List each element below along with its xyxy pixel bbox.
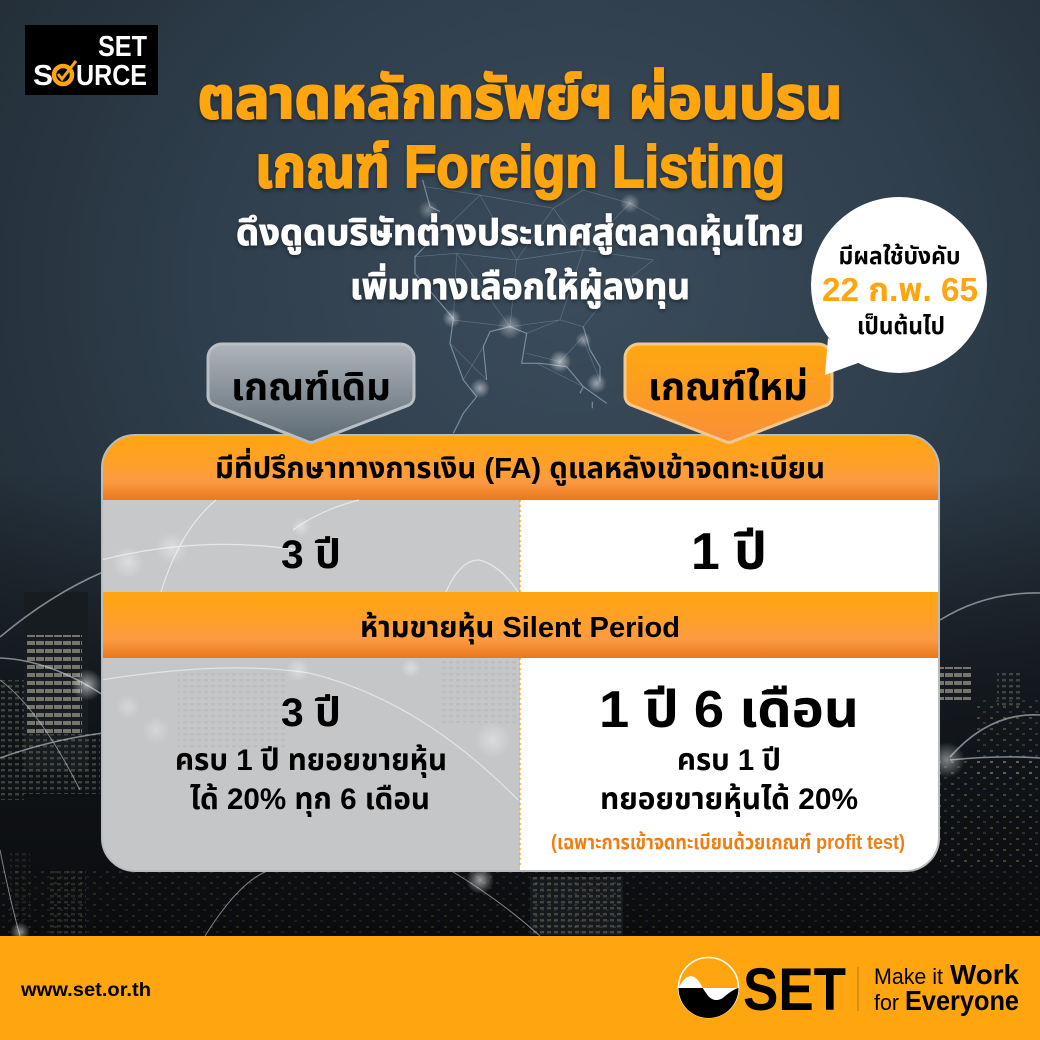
logo: SET SOURCE: URCE	[76, 60, 147, 92]
old rule cell: silent period	[101, 658, 520, 870]
tag: new rule: เกณฑ์ใหม่	[648, 367, 808, 409]
header: silent period: ห้ามขายหุ้น Silent Period	[360, 612, 680, 644]
new rule cell: silent period: ทยอยขายหุ้นได้ 20%	[600, 783, 858, 817]
callout: effective date: เป็นต้นไป	[857, 312, 945, 340]
old rule cell: 3 years	[101, 500, 520, 592]
panel: comparison card	[101, 436, 938, 870]
tag: old rule: เกณฑ์เดิม	[231, 367, 391, 409]
tag: old rule	[208, 344, 414, 442]
header: silent period	[103, 592, 938, 658]
slogan: Everyone	[905, 985, 1019, 1016]
old rule cell: 3 years: 3 ปี	[281, 533, 341, 577]
subtitle: เพิ่มทางเลือกให้ผู้ลงทุน	[350, 263, 690, 308]
new rule cell: silent period: (เฉพาะการเข้าจดทะเบียนด้วยเกณฑ์ profit test)	[551, 832, 905, 854]
logo: SET SOURCE: SET	[98, 31, 147, 63]
map network	[415, 180, 660, 433]
callout: effective date: มีผลใช้บังคับ	[838, 242, 960, 270]
header: financial advisor	[103, 436, 938, 500]
slogan: for	[874, 990, 899, 1015]
new rule cell: 1 year: 1 ปี	[691, 523, 767, 581]
slogan	[874, 959, 1019, 1016]
footer band	[0, 936, 1040, 1040]
old rule cell: silent period: ได้ 20% ทุก 6 เดือน	[190, 783, 430, 817]
logo: SET: SET	[743, 956, 846, 1023]
website url: www.set.or.th	[20, 980, 151, 1001]
subtitle: ดึงดูดบริษัทต่างประเทศสู่ตลาดหุ้นไทย	[236, 212, 804, 254]
slogan: Work	[950, 959, 1019, 990]
logo: SET SOURCE	[25, 25, 158, 95]
skyline	[0, 592, 1040, 936]
logo: SET SOURCE: S	[33, 60, 53, 92]
header: financial advisor: มีที่ปรึกษาทางการเงิน (FA) ดูแลหลังเข้าจดทะเบียน	[215, 447, 825, 486]
old rule cell: silent period: ครบ 1 ปี ทยอยขายหุ้น	[175, 744, 447, 778]
new rule cell: 1 year	[520, 500, 938, 592]
title: เกณฑ์ Foreign Listing	[255, 134, 785, 200]
slogan: Make it	[874, 964, 943, 989]
old rule cell: silent period: 3 ปี	[281, 691, 341, 735]
callout: effective date: 22 ก.พ. 65	[822, 271, 978, 308]
new rule cell: silent period: ครบ 1 ปี	[677, 744, 781, 777]
title: ตลาดหลักทรัพย์ฯ ผ่อนปรน	[198, 65, 842, 131]
new rule cell: silent period: 1 ปี 6 เดือน	[599, 681, 859, 739]
callout: effective date	[811, 197, 987, 375]
title	[198, 65, 842, 200]
subtitle	[236, 212, 804, 308]
tag: new rule	[625, 344, 832, 442]
logo: SET	[678, 956, 846, 1023]
new rule cell: silent period	[520, 658, 938, 870]
